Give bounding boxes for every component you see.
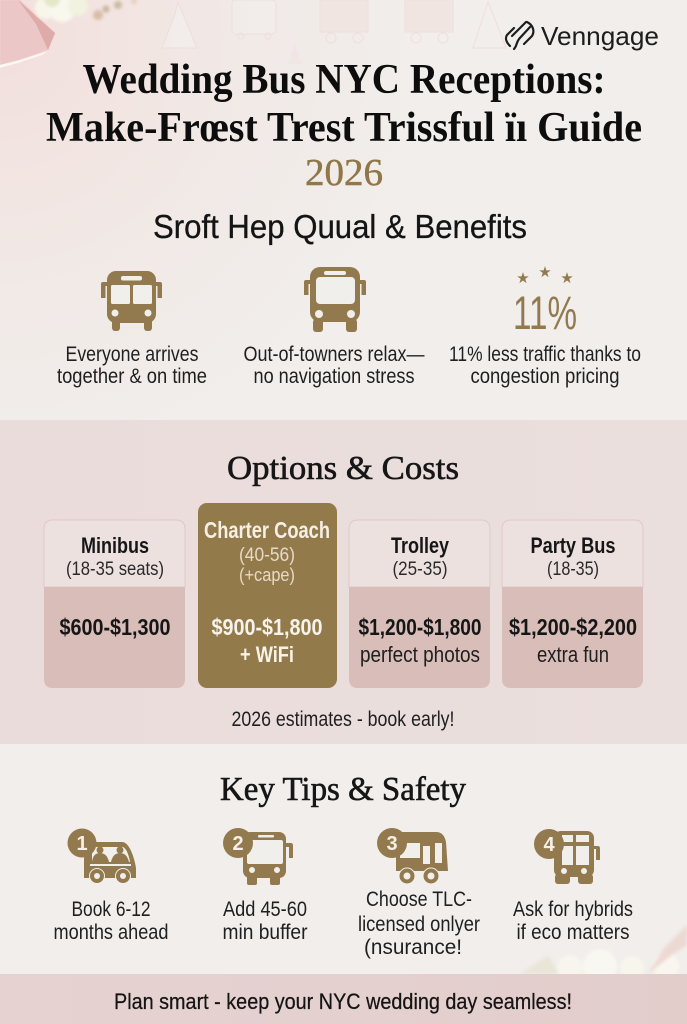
card: minibus	[44, 520, 185, 688]
card: trolley: perfect photos	[360, 642, 480, 667]
title: Wedding Bus NYC Receptions:	[82, 57, 606, 103]
card: party bus: extra fun	[537, 642, 609, 667]
title: Make-Frœst Trest Trissful ïı Guide	[46, 105, 642, 151]
card: minibus: Minibus	[81, 533, 149, 558]
text: tip 4	[513, 898, 633, 944]
text: benefit 3	[449, 343, 641, 388]
card: charter coach, highlighted: (+cape)	[239, 565, 295, 585]
tip 3: shuttle icon with badge	[377, 828, 448, 884]
tip 2: bus icon with badge	[223, 828, 293, 885]
tip 1: van icon with badge: 1	[76, 833, 88, 855]
heading: tips: Key Tips & Safety	[220, 771, 466, 808]
icon: three stars with 11%: 11%	[513, 286, 577, 339]
title	[46, 57, 642, 194]
text: tip 3: (nsurance!	[364, 936, 462, 959]
panel: key tips and safety	[54, 771, 633, 959]
decoration: white flowers, bottom right	[520, 925, 687, 983]
footer banner	[0, 974, 687, 1024]
icon: three stars with 11%	[513, 264, 577, 339]
text: benefit 3: congestion pricing	[470, 365, 620, 388]
text: tip 2: min buffer	[222, 921, 308, 944]
card: charter coach, highlighted: $900-$1,800	[212, 614, 322, 640]
tip 4: hybrid bus icon with badge: 4	[543, 834, 555, 856]
icon: bus with single windscreen	[304, 267, 366, 332]
text: tip 4: if eco matters	[516, 921, 630, 944]
text: tip 1: months ahead	[54, 921, 168, 944]
card: charter coach, highlighted: Charter Coach	[204, 517, 330, 543]
card: minibus: (18-35 seats)	[66, 559, 164, 580]
icon: three stars with 11%: ★	[560, 270, 574, 287]
decoration: pink dress and flowers, top left	[0, 0, 137, 68]
heading: benefits: Sroft Hep Quual & Benefits	[153, 208, 527, 245]
card: charter coach, highlighted: (40-56)	[239, 545, 295, 566]
panel: benefits	[57, 208, 641, 388]
text: tip 2: Add 45-60	[223, 898, 307, 921]
tip 1: van icon with badge	[68, 828, 136, 884]
icon: three stars with 11%: ★	[516, 270, 530, 287]
heading: options: Options & Costs	[227, 450, 459, 487]
text: tip 1: Book 6-12	[72, 898, 150, 921]
card: trolley: Trolley	[391, 533, 450, 558]
tip 2: bus icon with badge: 2	[232, 833, 244, 855]
text: tip 3	[358, 888, 480, 959]
card: charter coach, highlighted	[198, 503, 337, 688]
text: tip 2	[222, 898, 308, 944]
text: benefit 1: together & on time	[57, 365, 207, 388]
card: party bus: (18-35)	[547, 559, 599, 580]
card: minibus: $600-$1,300	[60, 614, 170, 640]
text: benefit 1	[57, 343, 207, 388]
logo: Venngage: Venngage	[541, 21, 659, 51]
icon: Venngage mark	[506, 22, 533, 49]
text: benefit 2: Out-of-towners relax—	[244, 343, 424, 366]
text: benefit 3: 11% less traffic thanks to	[449, 343, 641, 366]
text: benefit 2	[244, 343, 424, 388]
icon: bus with split windscreen	[101, 271, 162, 331]
card: trolley: (25-35)	[392, 559, 448, 580]
text: benefit 2: no navigation stress	[254, 365, 414, 388]
card: party bus	[502, 520, 643, 688]
footer banner: Plan smart - keep your NYC wedding day seamless!	[114, 989, 572, 1014]
text: tip 1	[54, 898, 168, 944]
card: party bus: Party Bus	[530, 533, 616, 558]
text: tip 4: Ask for hybrids	[513, 898, 633, 921]
text: tip 3: licensed onlyer	[358, 913, 480, 936]
card: trolley: $1,200-$1,800	[358, 614, 482, 640]
tip 4: hybrid bus icon with badge	[534, 829, 600, 884]
note: estimates: 2026 estimates - book early!	[232, 708, 454, 731]
card: charter coach, highlighted: + WiFi	[240, 642, 294, 667]
icon: three stars with 11%: ★	[538, 264, 552, 281]
title year: 2026	[305, 152, 383, 194]
panel: options and costs	[0, 420, 687, 744]
card: trolley	[349, 520, 490, 688]
card: party bus: $1,200-$2,200	[509, 614, 637, 640]
tip 3: shuttle icon with badge: 3	[386, 833, 398, 855]
decoration: faint wedding outline icons, top	[162, 0, 506, 64]
text: benefit 1: Everyone arrives	[66, 343, 198, 366]
text: tip 3: Choose TLC-	[366, 888, 472, 911]
